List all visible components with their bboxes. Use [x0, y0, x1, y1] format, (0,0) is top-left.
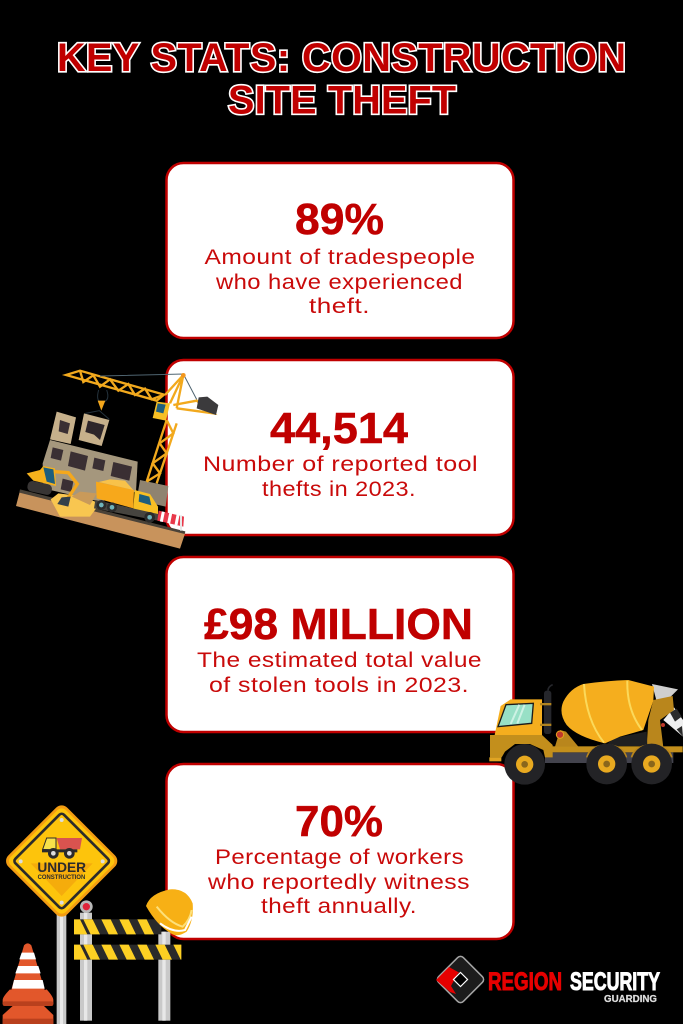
logo: Region Security Guarding [436, 955, 660, 1005]
barrier [157, 511, 184, 527]
stat: £98 million: £98 MILLION [204, 600, 473, 649]
wheels [504, 744, 672, 785]
title: KEY STATS: CONSTRUCTION [57, 36, 626, 80]
drum [561, 680, 654, 743]
crane [66, 371, 213, 483]
dump truck [96, 482, 134, 508]
description: reported thefts: Number of reported tool [203, 452, 478, 476]
description: stolen value [197, 648, 482, 697]
traffic cone [3, 943, 53, 1024]
description: reported thefts [203, 452, 478, 501]
logo: Region Security Guarding: REGION [488, 968, 562, 996]
frame [545, 752, 673, 763]
excavator [27, 480, 53, 496]
stat: 70%: 70% [295, 797, 383, 846]
description: tradespeople: who have experienced [215, 270, 463, 294]
description: stolen value: The estimated total value [197, 648, 482, 672]
logo mark [436, 955, 485, 1004]
description: witnesses: Percentage of workers [215, 845, 464, 869]
chute [652, 684, 678, 701]
panel: workers witnessing theft stat [166, 764, 514, 939]
title [57, 36, 626, 122]
logo: Region Security Guarding: GUARDING [604, 993, 657, 1005]
sign wording: CONSTRUCTION [38, 875, 85, 881]
panel: reported tool thefts stat [166, 360, 514, 535]
description: witnesses: theft annually. [261, 894, 417, 918]
diamond sign [3, 802, 121, 920]
description: reported thefts: thefts in 2023. [262, 477, 416, 501]
icon: under construction roadworks signs [3, 802, 193, 1024]
stat: 89%: 89% [295, 195, 384, 244]
icon: construction site with crane [16, 371, 218, 549]
description: tradespeople: theft. [309, 294, 370, 318]
stat: 44,514: 44,514 [270, 404, 409, 453]
icon: cement mixer truck [489, 680, 683, 785]
description: tradespeople: Amount of tradespeople [204, 245, 476, 269]
exhaust [544, 691, 551, 734]
description: tradespeople [204, 245, 476, 318]
description: witnesses [207, 845, 470, 918]
barrier posts [80, 913, 92, 1021]
barrier boards [74, 919, 161, 934]
panel: tradespeople theft stat [166, 163, 514, 338]
cab [495, 699, 542, 735]
sign wording: UNDER [37, 859, 86, 875]
title: SITE THEFT [228, 78, 456, 122]
sign post [57, 913, 66, 1024]
panel: stolen value stat [166, 557, 514, 732]
hard hat [146, 889, 193, 935]
sign truck [57, 838, 82, 849]
description: stolen value: of stolen tools in 2023. [209, 673, 469, 697]
description: witnesses: who reportedly witness [207, 870, 470, 894]
